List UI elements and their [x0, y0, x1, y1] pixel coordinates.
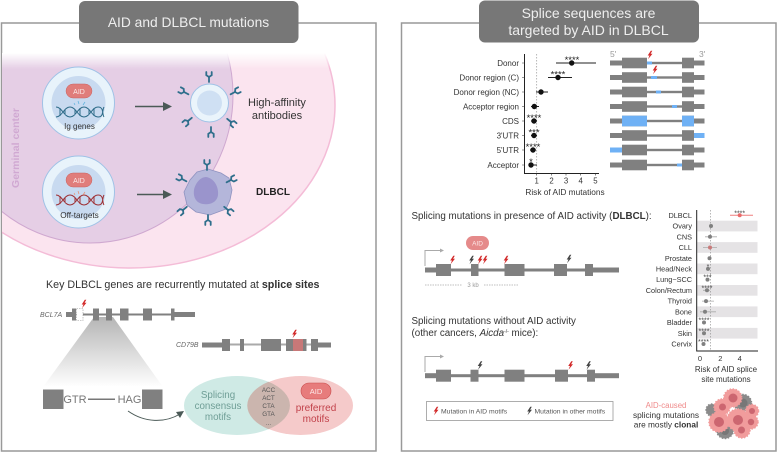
gene diagram: with AID activity — [425, 236, 619, 289]
heading: splicing mutations without AID: -/- — [504, 329, 509, 335]
venn diagram: motifs: Splicing — [201, 390, 235, 401]
heading: key DLBCL genes: Key DLBCL genes are recurrently mutated at splice sites — [46, 279, 320, 291]
venn diagram: motifs: preferred — [296, 403, 336, 414]
gene diagram: without AID activity — [425, 354, 619, 382]
gene diagram: with AID activity: 3 kb — [467, 283, 479, 289]
icon: off-targets nucleus: Off-targets — [60, 211, 99, 220]
splice site close-up — [43, 390, 162, 409]
chart: risk of AID mutations: **** — [551, 70, 566, 80]
chart: risk of AID mutations: 5'UTR — [497, 146, 519, 155]
venn diagram: motifs: motifs — [205, 412, 231, 423]
chart: risk of AID mutations: Acceptor — [487, 161, 519, 170]
chart: risk of AID mutations: 3 — [564, 176, 568, 186]
legend: mutation types: Mutation in other motifs — [534, 408, 606, 416]
chart: risk of AID mutations: Donor region (C) — [459, 74, 519, 82]
venn diagram: motifs: ACT — [262, 395, 275, 402]
splice site close-up: HAG — [118, 394, 141, 406]
heading: splicing mutations with AID: Splicing mutations in presence of AID activity (DLBCL): — [412, 211, 652, 222]
label: DLBCL: DLBCL — [256, 187, 290, 198]
left heading: AID and DLBCL mutations — [108, 15, 269, 30]
icon: DLBCL cell — [176, 160, 237, 225]
icon: Ig genes nucleus: AID — [73, 89, 85, 96]
gene diagrams: sequence regions: 5' — [610, 49, 617, 59]
icon: off-targets nucleus — [42, 156, 114, 228]
heading: splicing mutations without AID: Aicda — [479, 328, 505, 339]
label: high-affinity antibodies: High-affinity — [248, 97, 306, 109]
chart: risk of AID splice site mutations: **** — [734, 210, 745, 218]
chart: risk of AID splice site mutations: **** — [699, 328, 710, 335]
germinal center background — [2, 53, 336, 269]
chart: risk of AID splice site mutations: Head/Neck — [656, 264, 692, 274]
chart: risk of AID mutations: Acceptor region — [463, 102, 519, 112]
gene: BCL7A: BCL7A — [40, 312, 63, 319]
chart: risk of AID mutations: CDS — [502, 117, 519, 126]
text: clonal note: are mostly — [634, 420, 674, 430]
chart: risk of AID mutations: **** — [527, 113, 542, 124]
chart: risk of AID mutations: * — [529, 157, 533, 168]
chart: risk of AID splice site mutations: **** — [702, 285, 713, 292]
chart: risk of AID splice site mutations: Thyroid — [668, 297, 692, 306]
right heading: Splice sequences are — [522, 5, 656, 21]
label: high-affinity antibodies: antibodies — [252, 110, 303, 122]
icon: Ig genes nucleus — [42, 67, 114, 139]
left heading — [79, 1, 298, 43]
arrow: Ig genes to plasma cell — [135, 102, 172, 111]
chart: risk of AID splice site mutations: **** — [699, 318, 710, 325]
right heading: targeted by AID in DLBCL — [508, 22, 669, 38]
chart: risk of AID splice site mutations: Skin — [678, 329, 692, 338]
chart: risk of AID splice site mutations: Colon/Rectum — [646, 286, 692, 295]
venn diagram: motifs — [184, 376, 353, 435]
text: clonal note: splicing mutations — [633, 410, 699, 420]
chart: risk of AID mutations: **** — [526, 142, 541, 153]
chart: risk of AID splice site mutations: Cervix — [671, 340, 692, 349]
chart: risk of AID splice site mutations: 4 — [738, 354, 742, 363]
chart: risk of AID mutations: Risk of AID mutations — [525, 187, 605, 197]
gene diagrams: sequence regions — [610, 49, 706, 170]
text: clonal note: clonal — [674, 420, 698, 430]
chart: risk of AID splice site mutations: Prostate — [665, 254, 692, 263]
splice site close-up: GTR — [63, 394, 87, 406]
right heading — [479, 0, 699, 42]
heading: splicing mutations without AID: mice): — [509, 328, 538, 339]
chart: risk of AID splice site mutations: Bladder — [667, 318, 693, 327]
chart: risk of AID splice site mutations: DLBCL — [668, 211, 692, 220]
panel: AID and DLBCL mutations — [0, 0, 376, 451]
icon: antibody-secreting cell — [178, 72, 241, 137]
icon: Ig genes nucleus: Ig genes — [64, 122, 95, 131]
chart: risk of AID mutations: 3'UTR — [497, 132, 519, 140]
gene diagram: with AID activity: AID — [472, 240, 483, 248]
chart: risk of AID splice site mutations: CNS — [677, 232, 692, 241]
chart: risk of AID splice site mutations: * — [707, 264, 710, 271]
chart: risk of AID splice site mutations: Ovary — [673, 222, 692, 231]
chart: risk of AID mutations: 2 — [549, 176, 554, 186]
arrow: off-targets to DLBCL — [137, 190, 172, 199]
chart: risk of AID splice site mutations: **** — [698, 339, 709, 346]
venn diagram: motifs: AID — [310, 387, 323, 396]
chart: risk of AID splice site mutations: 0 — [698, 354, 702, 363]
venn diagram: motifs: ACC — [262, 387, 276, 394]
chart: risk of AID splice site mutations: site mutations — [701, 375, 751, 384]
chart: risk of AID mutations: 1 — [535, 176, 539, 186]
gene: CD79B: CD79B — [176, 342, 199, 349]
chart: risk of AID mutations: *** — [528, 128, 540, 138]
chart: risk of AID splice site mutations: Risk of AID splice — [695, 365, 758, 374]
chart: risk of AID splice site mutations: *** — [703, 275, 712, 282]
zoom triangle — [43, 317, 163, 387]
chart: risk of AID splice site mutations: Lung−SCC — [656, 275, 692, 284]
chart: risk of AID mutations — [454, 54, 605, 197]
venn diagram: motifs: GTA — [262, 411, 276, 418]
venn diagram: motifs: motifs — [303, 414, 329, 425]
chart: risk of AID mutations: 5 — [593, 176, 598, 186]
arrow: splice site to motifs — [128, 411, 184, 420]
gene: BCL7A — [40, 300, 195, 320]
heading: splicing mutations without AID: Splicing mutations without AID activity — [412, 316, 576, 327]
venn diagram: motifs: ... — [266, 420, 271, 427]
icon: clonal cell cluster — [706, 389, 758, 438]
text: clonal note: AID-caused — [646, 401, 686, 410]
chart: risk of AID splice site mutations: Bone — [675, 307, 692, 316]
gene: CD79B — [176, 330, 331, 351]
legend: mutation types: Mutation in AID motifs — [441, 408, 508, 416]
legend: mutation types — [426, 402, 613, 420]
venn diagram: motifs: consensus — [195, 401, 242, 412]
label: germinal center: Germinal center — [10, 108, 22, 188]
chart: risk of AID mutations: 4 — [579, 176, 584, 186]
chart: risk of AID splice site mutations — [646, 210, 758, 384]
gene diagrams: sequence regions: 3' — [699, 49, 706, 59]
chart: risk of AID mutations: **** — [565, 55, 580, 66]
chart: risk of AID splice site mutations: 2 — [718, 354, 722, 363]
venn diagram: motifs: CTA — [262, 403, 275, 410]
panel: splice sequences targeted by AID — [402, 0, 776, 451]
heading: splicing mutations without AID: (other cancers, — [412, 328, 480, 339]
icon: off-targets nucleus: AID — [73, 178, 85, 185]
chart: risk of AID splice site mutations: CLL — [679, 243, 692, 252]
chart: risk of AID mutations: Donor region (NC) — [454, 88, 519, 97]
chart: risk of AID mutations: Donor — [497, 59, 519, 68]
